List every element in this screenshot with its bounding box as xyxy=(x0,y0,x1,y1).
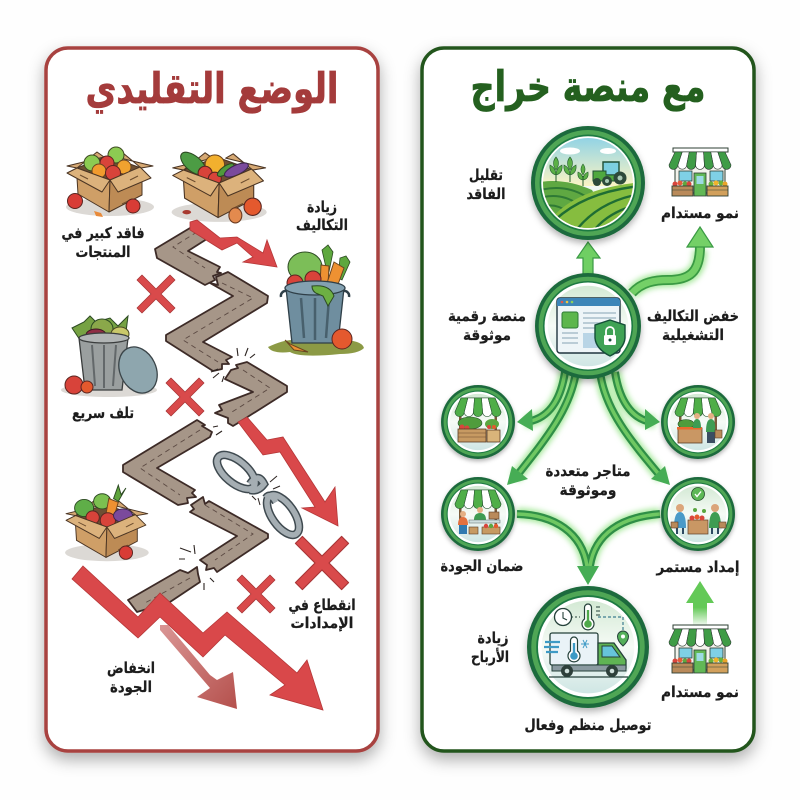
icon: store circle top left xyxy=(441,385,515,459)
icon: shop top xyxy=(669,148,731,196)
arrow: quick spoilage xyxy=(238,417,338,526)
arrow: rising costs xyxy=(190,220,277,267)
icon: red cross 4 xyxy=(237,575,275,613)
label: trusted digital platform: موثوقة xyxy=(463,326,511,344)
chart: broken supply road xyxy=(123,228,287,612)
label: multiple trusted stores: وموثوقة xyxy=(560,481,616,499)
icon: farm circle xyxy=(531,126,645,240)
label: reduce loss: تقليل xyxy=(469,166,503,184)
icon: red cross 2 xyxy=(166,378,204,416)
label: high product loss xyxy=(62,224,144,261)
label: lower operating costs: خفض التكاليف xyxy=(647,307,739,325)
icon: box with mixed produce xyxy=(65,485,149,561)
arrow: platform to farm xyxy=(577,242,600,276)
label: lower quality xyxy=(107,659,155,696)
heading: with Kharaj platform: مع منصة خراج xyxy=(470,62,706,112)
icon: delivery truck circle xyxy=(527,586,649,708)
label: reduce loss xyxy=(466,166,506,203)
label: higher profits: زيادة xyxy=(478,629,508,647)
icon: store circle top right xyxy=(661,385,735,459)
label: quality assurance: ضمان الجودة xyxy=(440,557,524,575)
arrow: lower shop upward xyxy=(686,581,714,625)
arrow: platform to shop xyxy=(632,227,713,293)
label: high product loss: فاقد كبير في xyxy=(62,224,144,242)
label: lower operating costs xyxy=(647,307,739,344)
arrows: stores merging to delivery xyxy=(517,514,660,585)
icon: red cross 1 xyxy=(137,275,175,313)
label: higher costs xyxy=(296,198,348,234)
icon: store circle bottom left xyxy=(441,477,515,551)
label: trusted digital platform xyxy=(448,307,526,344)
label: multiple trusted stores xyxy=(546,462,630,499)
label: quick spoilage: تلف سريع xyxy=(72,404,134,422)
panel: with Kharaj platform xyxy=(422,48,754,751)
label: supply disruption: الإمدادات xyxy=(290,614,354,632)
icon: red cross 3 xyxy=(295,536,349,590)
icon: broken chain xyxy=(211,449,305,540)
label: higher profits xyxy=(471,629,509,666)
label: higher costs: التكاليف xyxy=(296,216,348,234)
label: higher costs: زيادة xyxy=(307,198,337,216)
label: trusted digital platform: منصة رقمية xyxy=(448,307,526,325)
label: high product loss: المنتجات xyxy=(76,243,130,261)
label: lower operating costs: التشغيلية xyxy=(662,326,724,344)
label: organized delivery: توصيل منظم وفعال xyxy=(524,716,652,734)
label: higher profits: الأرباح xyxy=(471,648,509,666)
heading: traditional situation: الوضع التقليدي xyxy=(86,64,338,114)
road surface cracks xyxy=(140,232,270,603)
label: supply disruption xyxy=(288,596,356,632)
icon: store circle bottom right xyxy=(661,477,735,551)
icon: digital platform circle xyxy=(535,273,641,379)
icon: damaged box with vegetables xyxy=(172,148,267,223)
label: reduce loss: الفاقد xyxy=(466,185,506,203)
icon: cardboard box with fruit xyxy=(66,147,154,217)
arrows: platform to four stores xyxy=(507,372,670,485)
icon: trash can with open lid xyxy=(61,316,164,399)
icon: overflowing blue trash can xyxy=(268,245,364,356)
label: continuous supply: إمداد مستمر xyxy=(656,558,740,576)
label: sustainable growth bottom: نمو مستدام xyxy=(661,683,739,701)
label: sustainable growth top: نمو مستدام xyxy=(661,204,739,222)
label: supply disruption: انقطاع في xyxy=(288,596,356,614)
label: lower quality: الجودة xyxy=(110,678,152,696)
panel: traditional situation xyxy=(46,48,378,751)
road crack sparks xyxy=(179,348,255,590)
arrow: large quality decline xyxy=(72,566,323,710)
icon: shop bottom xyxy=(669,625,731,673)
label: lower quality: انخفاض xyxy=(107,659,155,677)
arrow: faded quality decline xyxy=(160,625,237,709)
label: multiple trusted stores: متاجر متعددة xyxy=(546,462,630,480)
